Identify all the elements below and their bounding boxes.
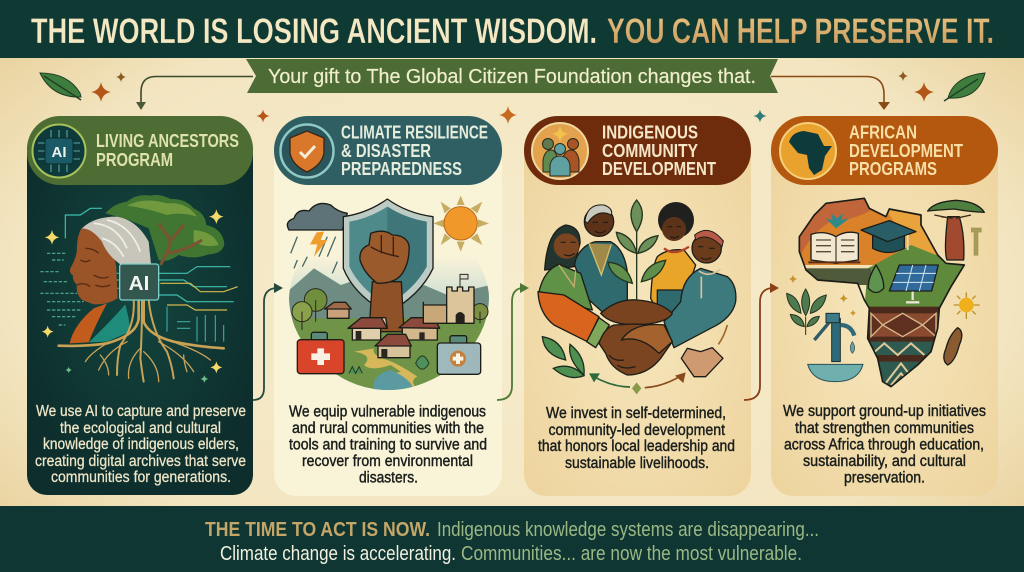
arrow: panel one to panel two	[253, 283, 283, 400]
illustration: fist shield and village	[287, 196, 491, 392]
first aid kit: teal	[437, 336, 481, 374]
subtitle ribbon: Your gift to The Global Citizen Foundation changes that.	[268, 66, 756, 88]
panel: climate resilience	[274, 116, 502, 496]
title: first sentence: THE WORLD IS LOSING ANCIENT WISDOM.	[31, 12, 597, 51]
decorative leaf left	[40, 73, 81, 100]
water pump	[808, 313, 863, 382]
open book	[808, 232, 860, 263]
body text: living ancestors: We use AI to capture and preserve	[36, 403, 246, 420]
panel: indigenous community development	[524, 116, 751, 496]
heading pill: living ancestors: PROGRAM	[96, 150, 173, 170]
small handshake	[681, 348, 723, 377]
heading pill: african development: AFRICAN	[849, 122, 917, 142]
heading pill: indigenous community: INDIGENOUS	[602, 122, 698, 142]
body text: climate resilience: We equip vulnerable indigenous	[289, 404, 486, 420]
body text: living ancestors: knowledge of indigenous elders,	[43, 436, 239, 453]
illustration: elder, tree and AI roots	[40, 195, 238, 383]
garments	[70, 303, 107, 343]
body text: indigenous community: that honors local leadership and	[538, 438, 735, 455]
tree on map	[868, 265, 884, 292]
body text: climate resilience: recover from environmental	[302, 453, 473, 470]
body text: indigenous community: community-led development	[548, 422, 726, 439]
arrow: ribbon to first program	[136, 76, 253, 110]
face	[70, 228, 118, 304]
heading pill: living ancestors: LIVING ANCESTORS	[96, 131, 239, 151]
AI chip	[120, 264, 159, 300]
castle	[423, 274, 474, 323]
body text: indigenous community	[538, 405, 735, 472]
icon: africa map	[780, 123, 836, 179]
arrow: panel two to panel three	[497, 283, 529, 400]
heading pill: african development: DEVELOPMENT	[849, 141, 963, 161]
arrow: ribbon to last program	[771, 76, 890, 110]
small sparkles	[789, 275, 856, 316]
heading pill: indigenous community	[524, 116, 751, 185]
man with headband	[664, 230, 736, 348]
woman in green	[538, 225, 609, 348]
icon: AI chip: AI	[52, 144, 66, 161]
footer line two: Communities... are now the most vulnerable.	[461, 543, 802, 565]
illustration: africa and development	[787, 195, 984, 390]
first aid kit: red	[297, 332, 344, 374]
sparkles	[42, 209, 224, 383]
subtitle ribbon	[246, 59, 778, 93]
shield	[343, 199, 433, 313]
seedling	[608, 200, 666, 300]
body text: climate resilience: and rural communities with the	[292, 420, 484, 437]
sun	[954, 292, 980, 319]
decorative leaf right	[944, 73, 985, 101]
body text: living ancestors: creating digital archives that serve	[35, 453, 246, 470]
heading pill: indigenous community: DEVELOPMENT	[602, 159, 716, 179]
icon: shield with check	[280, 124, 334, 178]
roots	[59, 300, 224, 382]
heading pill: climate resilience: PREPAREDNESS	[341, 159, 462, 179]
heading pill: climate resilience	[274, 116, 502, 185]
header band	[0, 0, 1024, 58]
africa map regions	[798, 195, 971, 390]
cloud	[287, 203, 347, 230]
tree	[105, 195, 224, 265]
body text: indigenous community: We invest in self-determined,	[546, 405, 726, 422]
heading pill: indigenous community: COMMUNITY	[602, 141, 698, 161]
illustration: community handshake and seedling	[538, 200, 736, 394]
body text: living ancestors: communities for generations.	[51, 469, 231, 486]
heading pill: climate resilience: & DISASTER	[341, 141, 431, 161]
panel: living ancestors program	[27, 116, 253, 495]
body text: climate resilience: disasters.	[359, 470, 418, 486]
footer line one: Indigenous knowledge systems are disappearing...	[437, 519, 819, 541]
clasped hands	[599, 324, 672, 375]
heading pill: african development	[771, 116, 998, 185]
teal plant on map	[826, 213, 849, 228]
icon: AI chip	[32, 124, 86, 178]
body text: climate resilience	[289, 404, 487, 486]
footer line two	[220, 543, 802, 565]
body text: african development: preservation.	[844, 470, 925, 486]
circular arrows	[589, 325, 727, 394]
body text: african development: We support ground-up initiatives	[783, 403, 986, 420]
heading pill: climate resilience: CLIMATE RESILIENCE	[341, 122, 488, 142]
panel: african development programs	[771, 116, 998, 496]
sun	[433, 196, 489, 252]
arrow: panel three to panel four	[744, 283, 779, 400]
baobab	[928, 200, 984, 260]
footer line one: THE TIME TO ACT IS NOW.	[205, 519, 430, 541]
grass tufts	[349, 356, 429, 373]
soil mound	[601, 300, 672, 325]
plant sprig	[787, 289, 826, 335]
heading pill: african development: PROGRAMS	[849, 159, 937, 179]
body text: living ancestors	[35, 403, 246, 486]
elder figure	[574, 205, 627, 313]
circuit lines	[40, 208, 238, 342]
heading pill: living ancestors	[27, 116, 253, 185]
trees	[292, 289, 488, 330]
body text: climate resilience: tools and training to survive and	[289, 436, 487, 454]
decorative sparkles	[91, 71, 934, 124]
body text: african development: that strengthen communities	[795, 420, 974, 437]
body text: african development: sustainability, and cultural	[803, 453, 966, 470]
lower left leaves	[542, 337, 584, 378]
madagascar	[944, 328, 962, 365]
rain and lightning	[291, 232, 337, 273]
icon: community group	[532, 123, 588, 179]
hair	[82, 217, 151, 264]
landscape	[287, 257, 491, 392]
body text: african development: across Africa through education,	[784, 436, 984, 454]
body text: indigenous community: sustainable livelihoods.	[565, 455, 709, 472]
body text: living ancestors: the ecological and cultural	[60, 420, 221, 437]
body text: african development	[783, 403, 986, 486]
fist and forearm	[360, 231, 409, 332]
footer line two: Climate change is accelerating.	[220, 543, 456, 565]
footer band	[0, 506, 1024, 572]
AI chip: AI	[129, 272, 149, 295]
solar panel	[889, 265, 938, 302]
village houses	[325, 302, 440, 358]
footer line one	[205, 519, 819, 541]
woman in yellow	[651, 202, 696, 313]
graduation cap	[861, 221, 916, 252]
